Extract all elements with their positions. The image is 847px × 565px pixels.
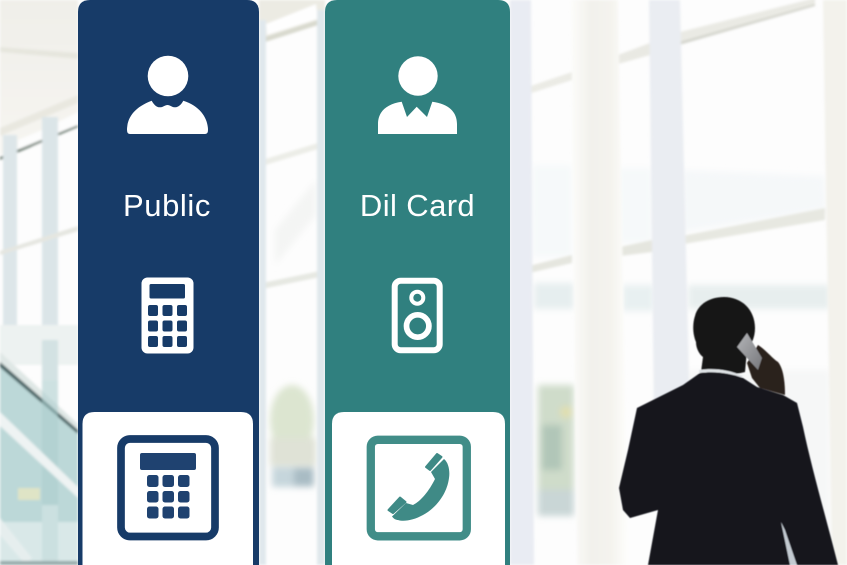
icon: person with bow collar bbox=[127, 56, 208, 134]
heading: Public: Public bbox=[123, 188, 211, 223]
phone bbox=[737, 333, 762, 370]
soft window tints bbox=[532, 165, 572, 257]
panel: white calculator card bbox=[82, 412, 253, 565]
jacket bbox=[619, 372, 838, 565]
icon: small calculator bbox=[142, 278, 194, 354]
escalator glass bbox=[42, 340, 58, 380]
man on phone bbox=[619, 297, 838, 565]
icon: person with shirt collar bbox=[378, 56, 457, 134]
columns bbox=[510, 0, 534, 565]
icon: speaker bbox=[395, 281, 440, 350]
panel: white phone card bbox=[332, 412, 505, 565]
left windows bbox=[0, 0, 78, 155]
heading: Dil Card: Dil Card bbox=[360, 188, 475, 223]
neck and head bbox=[693, 297, 755, 374]
collar bbox=[699, 369, 743, 378]
hand bbox=[747, 345, 785, 395]
right rails bbox=[525, 72, 572, 95]
icon: large calculator bbox=[121, 439, 215, 536]
icon: telephone handset in frame bbox=[371, 440, 467, 536]
centre windows bbox=[259, 0, 325, 42]
